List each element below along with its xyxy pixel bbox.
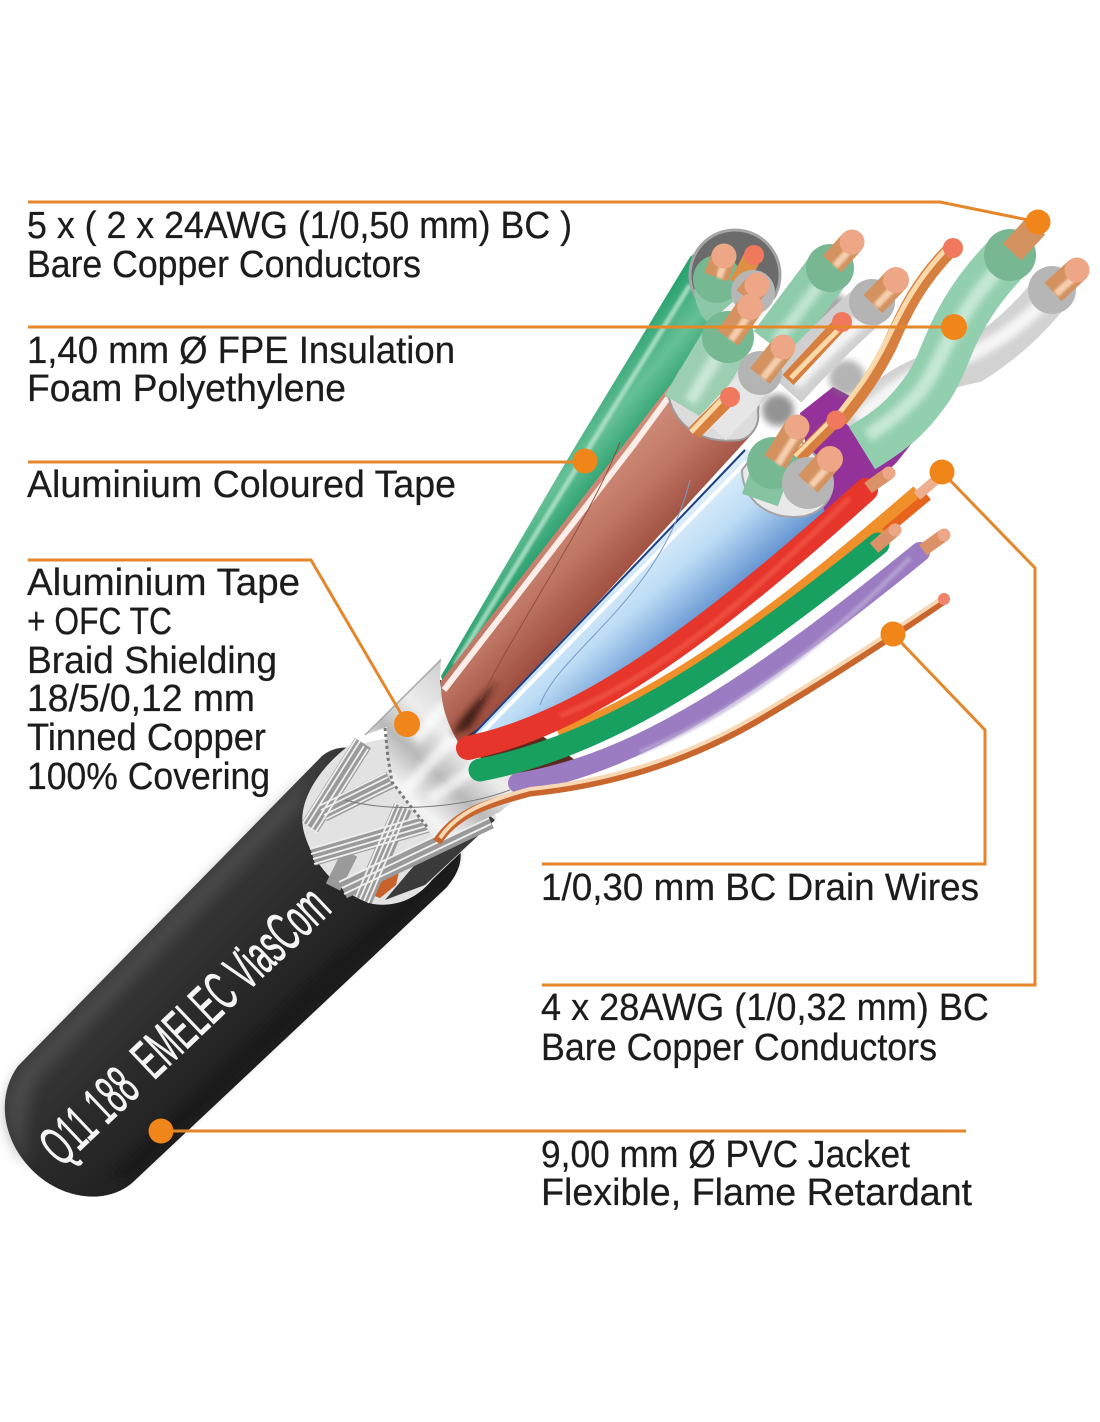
marker dot [394,711,420,737]
callout: PVC jacket: Flexible, Flame Retardant [541,1172,972,1214]
long drain wire [836,238,963,420]
white conductor middle [785,267,909,388]
callout: braid shielding: Tinned Copper [27,717,266,759]
green conductor rear [772,230,864,345]
marker dot [941,314,967,340]
purple tape around pair [800,387,920,512]
jacket print: Q11 188 EMELEC ViasCom [27,874,342,1177]
leader line [542,634,985,864]
dark gap between conductors [810,292,865,396]
label: 5 x ( 2 x 24AWG (1/0,50 mm) BC ) [27,205,572,247]
drain wire in middle pair [788,312,852,380]
callout: FPE insulation: Foam Polyethylene [27,368,346,410]
green conductor right [862,226,1036,448]
green aluminium tape [441,245,712,692]
marker dot [930,460,954,484]
callout: braid shielding [27,560,420,798]
bottom pair [742,410,846,517]
label: Aluminium Coloured Tape [27,464,456,506]
grey end of tape tube [690,230,780,350]
callout: bare copper conductors 24AWG: Bare Copper Conductors [27,244,421,286]
callout: bare copper conductors 28AWG: Bare Copper Conductors [541,1027,937,1069]
leader line [28,560,407,724]
cable illustration [5,226,1090,1197]
marker dot [1026,210,1050,234]
callout: bare copper conductors 28AWG [541,460,1035,1069]
callout: braid shielding: 18/5/0,12 mm [27,678,255,720]
callout: braid shielding: Braid Shielding [27,640,277,682]
outer PVC jacket with printing [5,748,461,1197]
blue tape around pair [462,448,832,745]
callout: braid shielding: + OFC TC [27,601,172,643]
orange insulated conductor [560,478,938,738]
marker dot [880,622,906,646]
leader line [28,202,1038,222]
callout: PVC jacket [148,1118,972,1214]
copper drain wire [437,593,950,842]
label: 9,00 mm Ø PVC Jacket [541,1134,910,1176]
purple insulated conductor [518,528,950,783]
grey shadow behind bottom pair [762,394,794,426]
green insulated conductor [480,524,902,770]
label: 1,40 mm Ø FPE Insulation [27,330,455,372]
leader line [28,460,585,464]
twisted pair in tape tube [693,244,775,314]
label: 4 x 28AWG (1/0,32 mm) BC [541,987,989,1029]
label: 1/0,30 mm BC Drain Wires [541,867,979,909]
leader line [542,472,1035,985]
front left pair [668,294,796,441]
braid shielding [302,735,497,905]
callout: drain wires [541,622,985,909]
brown tape around pair [441,385,752,742]
callout: FPE insulation [27,314,967,410]
label: Aluminium Tape [27,562,300,604]
leader line [161,1130,966,1132]
callout: bare copper conductors 24AWG [27,202,1050,286]
white conductor right [853,258,1090,430]
callout: aluminium coloured tape [27,448,598,506]
red insulated conductor [468,466,896,748]
inner cut shadow [440,680,575,778]
callout: braid shielding: 100% Covering [27,756,270,798]
marker dot [572,448,598,474]
marker dot [148,1118,174,1144]
leader line [28,326,954,328]
aluminium foil tape [345,658,548,842]
